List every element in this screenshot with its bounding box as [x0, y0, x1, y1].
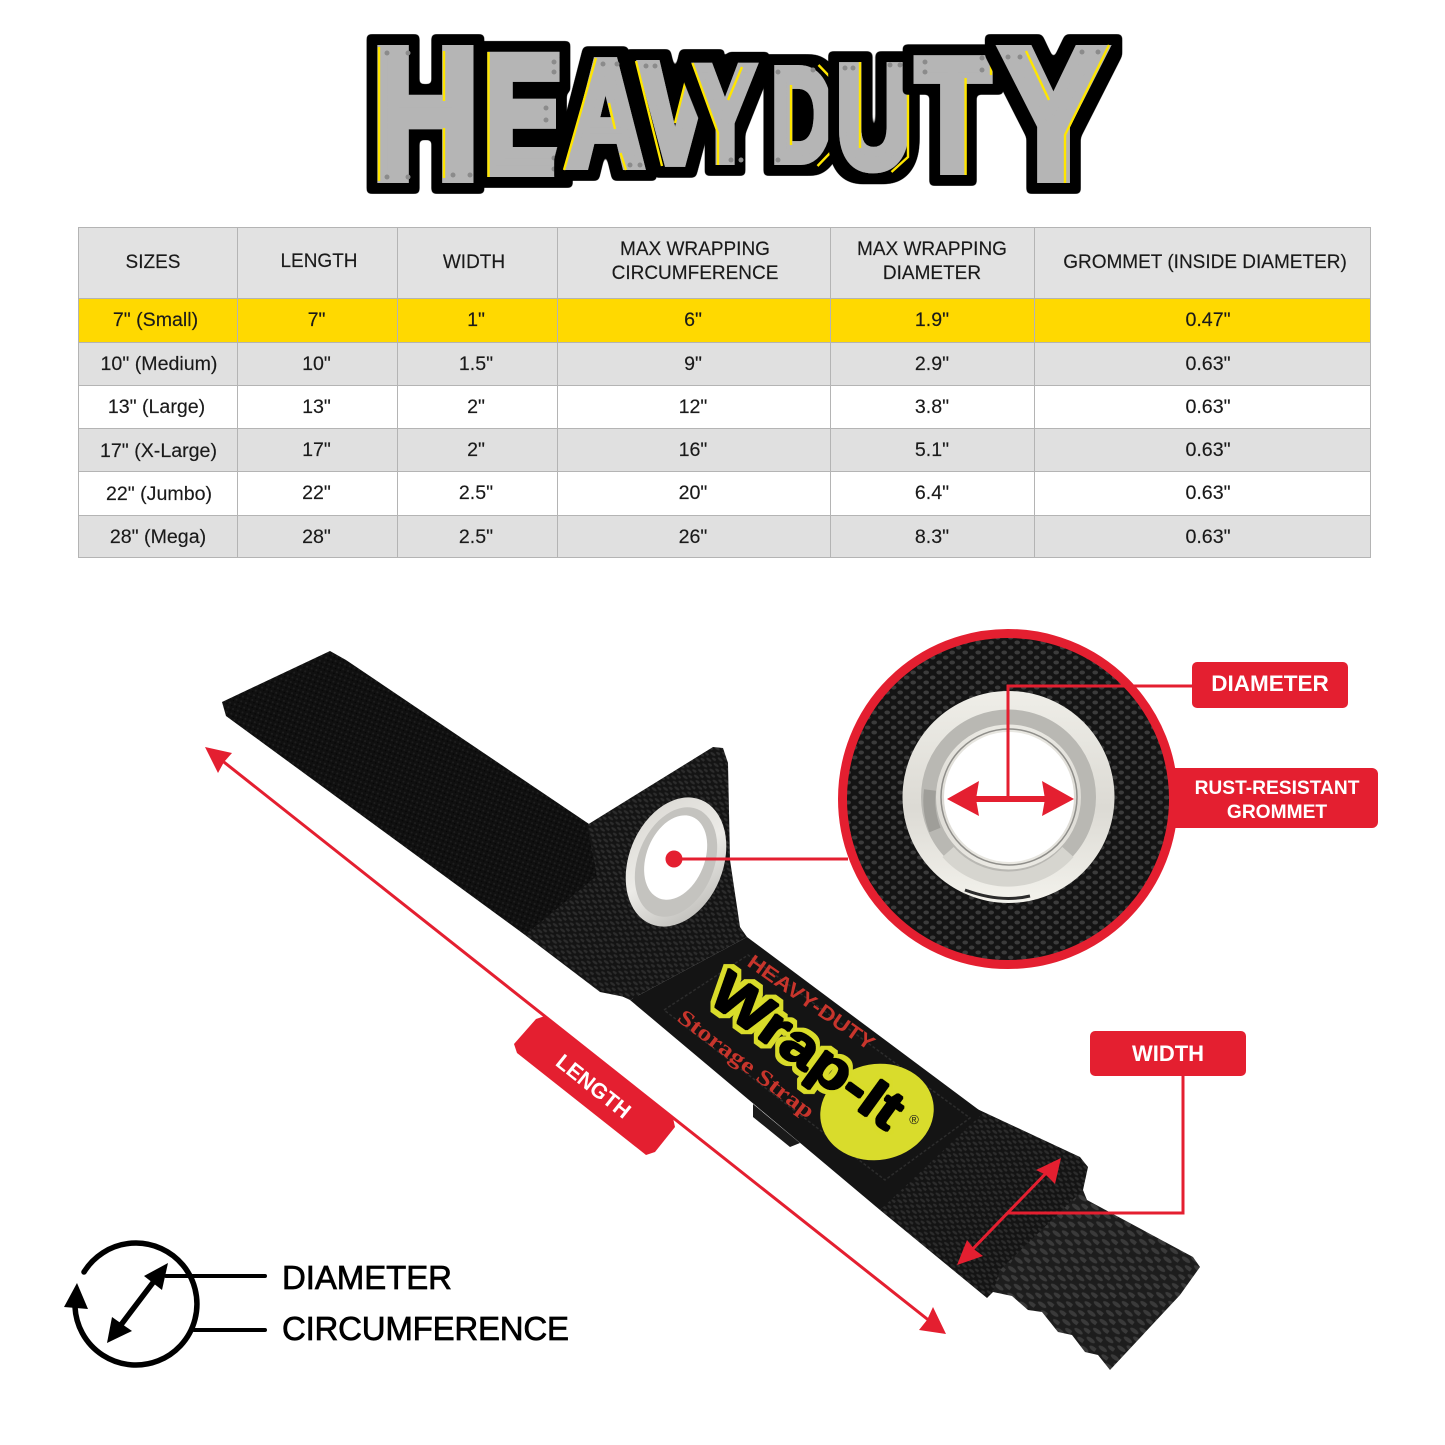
- label registered mark: ®: [909, 1112, 919, 1127]
- row: 13 inch large: 13": [302, 396, 331, 418]
- woven fabric: [842, 633, 1174, 965]
- table header: MAX WRAPPING: [620, 239, 770, 260]
- row: 7 inch small: 1.9": [915, 309, 949, 331]
- callout: diameter: [947, 662, 1348, 816]
- row: 17 inch x-large: [100, 439, 1231, 462]
- row: 28 inch mega: 28" (Mega): [110, 526, 206, 548]
- table header: [126, 239, 1347, 284]
- row: 7 inch small: [113, 309, 1231, 331]
- letter T: T: [916, 26, 990, 203]
- row: 22 inch jumbo: [106, 482, 1231, 505]
- table header: SIZES: [126, 252, 180, 273]
- label stitching: [664, 955, 970, 1180]
- table: size chart: [78, 227, 1371, 558]
- red ring: [842, 634, 1174, 964]
- letter Y: Y: [1002, 12, 1105, 216]
- row: 28 inch mega: 8.3": [915, 526, 949, 548]
- table header: MAX WRAPPING: [857, 239, 1007, 260]
- letter D: D: [772, 42, 832, 189]
- zoom circle: grommet detail: [842, 633, 1174, 965]
- row: 22 inch jumbo: 6.4": [915, 482, 949, 504]
- table header: WIDTH: [443, 252, 505, 273]
- callout: diameter: DIAMETER: [1211, 671, 1329, 696]
- table header: GROMMET (INSIDE DIAMETER): [1063, 252, 1347, 273]
- row: 7 inch small: 0.47": [1185, 309, 1231, 331]
- tail webbing: [975, 1190, 1200, 1370]
- legend: diameter and circumference icon: [64, 1243, 569, 1365]
- row: 7 inch small: 7": [308, 309, 325, 331]
- row: 13 inch large: 3.8": [915, 396, 949, 418]
- letter H: H: [373, 12, 478, 215]
- row: 22 inch jumbo: 20": [679, 482, 707, 504]
- row: 13 inch large: [108, 396, 1231, 418]
- table row backgrounds: [78, 227, 1371, 558]
- legend label: diameter: DIAMETER: [282, 1259, 452, 1296]
- strap photo: [222, 651, 1200, 1370]
- letter V: V: [641, 35, 709, 193]
- row: 10 inch medium: 10": [302, 353, 331, 375]
- label text: storage strap: Storage Strap: [673, 1004, 820, 1123]
- row: 13 inch large: 13" (Large): [108, 396, 205, 418]
- row: 17 inch x-large: 2": [467, 439, 485, 461]
- row: 22 inch jumbo: 2.5": [459, 482, 493, 504]
- row: 17 inch x-large: 17" (X-Large): [100, 440, 217, 462]
- callout: width: [957, 1031, 1246, 1265]
- row: 28 inch mega: 26": [679, 526, 707, 548]
- arrow: length: [205, 747, 946, 1334]
- callout: rust-resistant grommet: RUST-RESISTANT: [1195, 778, 1360, 799]
- title: HEAVY DUTY logo: [373, 12, 1109, 216]
- row: 17 inch x-large: 0.63": [1185, 439, 1231, 461]
- row: 17 inch x-large: 5.1": [915, 439, 949, 461]
- row: 13 inch large: 2": [467, 396, 485, 418]
- nylon section under tab: [525, 875, 640, 1000]
- letter E: E: [484, 23, 562, 207]
- row: 10 inch medium: 9": [684, 353, 702, 375]
- callout: rust-resistant grommet: GROMMET: [1227, 802, 1327, 823]
- letter A: A: [568, 31, 643, 197]
- yellow label circle: [813, 1055, 941, 1169]
- sliver under label: [753, 1104, 800, 1147]
- table header: LENGTH: [280, 251, 358, 272]
- row: 17 inch x-large: 16": [679, 439, 707, 461]
- row: 22 inch jumbo: 22" (Jumbo): [106, 483, 212, 505]
- row: 28 inch mega: 0.63": [1185, 526, 1231, 548]
- row: 28 inch mega: 2.5": [459, 526, 493, 548]
- table header: DIAMETER: [883, 263, 981, 284]
- large grommet: [902, 691, 1114, 903]
- row: 10 inch medium: 0.63": [1185, 353, 1231, 375]
- row: 10 inch medium: 2.9": [915, 353, 949, 375]
- arrow: length: LENGTH: [551, 1050, 635, 1123]
- small grommet: [607, 782, 745, 942]
- woven label: [630, 937, 983, 1210]
- tab with grommet: [580, 747, 747, 1000]
- callout: rust-resistant grommet: [1175, 768, 1378, 828]
- label text: wrap-it: Wrap-It: [699, 959, 917, 1141]
- row: 22 inch jumbo: 22": [302, 482, 331, 504]
- row: 17 inch x-large: 17": [302, 439, 331, 461]
- row: 10 inch medium: 1.5": [459, 353, 493, 375]
- row: 13 inch large: 12": [679, 396, 707, 418]
- row: 7 inch small: 7" (Small): [113, 309, 198, 331]
- row: 28 inch mega: 28": [302, 526, 331, 548]
- row: 7 inch small: 6": [684, 309, 702, 331]
- row: 22 inch jumbo: 0.63": [1185, 482, 1231, 504]
- legend label: circumference: CIRCUMFERENCE: [282, 1310, 569, 1347]
- letter Y: Y: [695, 40, 755, 190]
- callout: width: WIDTH: [1132, 1041, 1204, 1066]
- table header: CIRCUMFERENCE: [612, 263, 778, 284]
- row: 7 inch small: 1": [467, 309, 485, 331]
- icon: circle with arrows: [64, 1243, 265, 1365]
- webbing band: [880, 1108, 1088, 1298]
- callout: grommet pointer: [666, 850, 848, 868]
- row: 28 inch mega: [110, 526, 1231, 548]
- label text: heavy-duty: HEAVY-DUTY: [743, 951, 879, 1056]
- row: 10 inch medium: [101, 353, 1231, 375]
- letter U: U: [836, 36, 912, 198]
- row: 13 inch large: 0.63": [1185, 396, 1231, 418]
- velcro strap end: [222, 651, 598, 935]
- row: 10 inch medium: 10" (Medium): [101, 353, 217, 375]
